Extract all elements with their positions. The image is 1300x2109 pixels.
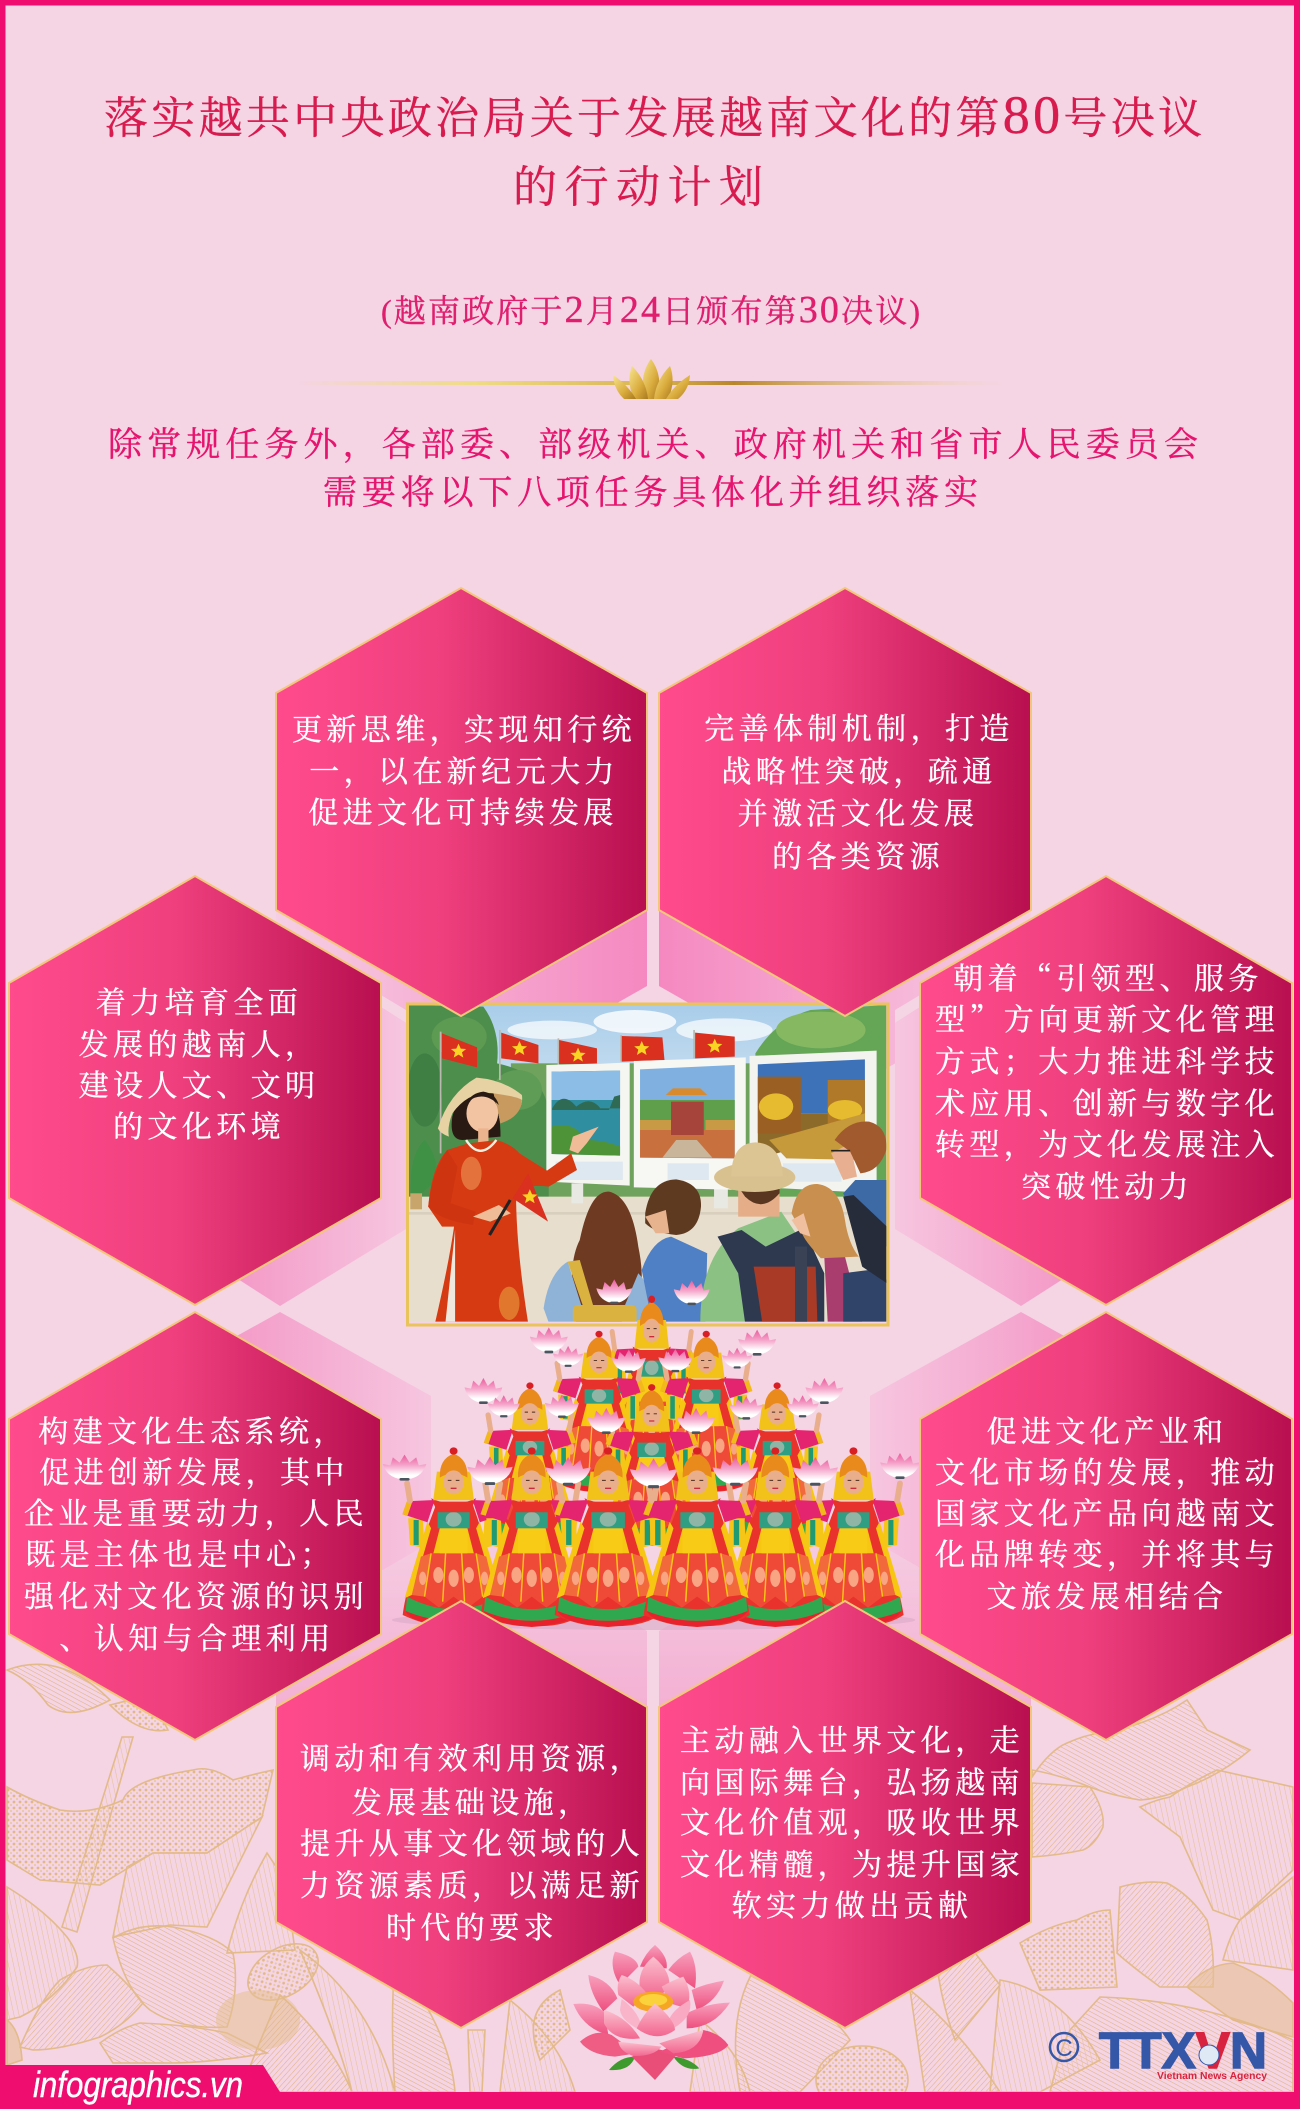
hexagon 5: cultural ecosystem: 企业是重要动力，人民 [24,1489,368,1533]
hexagon 3: people and environment: 着力培育全面 [96,978,302,1022]
hexagon 4: culture management: 朝着“引领型、服务 [953,954,1263,998]
hexagon 6: cultural industry: 文化市场的发展，推动 [935,1448,1279,1492]
hexagon 4: culture management: 术应用、创新与数字化 [935,1079,1279,1123]
logo: TTXVN Vietnam News Agency: Vietnam News Agency [1157,2071,1267,2082]
hexagon 8: international integration: 主动融入世界文化，走 [680,1716,1024,1760]
hexagon 8: international integration: 文化价值观，吸收世界 [680,1798,1024,1842]
hexagon 7: resources and infrastructure: 力资源素质，以满足新 [300,1861,644,1905]
hexagon 7: resources and infrastructure: 调动和有效利用资源， [300,1734,644,1778]
hexagon 2: institutions: 完善体制机制，打造 [704,704,1014,748]
hexagon 1: update thinking [276,588,647,1016]
subtitle: (越南政府于2月24日颁布第30决议) [381,289,920,331]
hexagon 7: resources and infrastructure [276,1601,647,2028]
logo: TTXVN Vietnam News Agency: C [1055,2035,1073,2062]
hexagon 8: international integration: 向国际舞台，弘扬越南 [680,1758,1024,1802]
hexagon 4: culture management: 型”方向更新文化管理 [935,995,1279,1039]
hexagon 3: people and environment [9,876,381,1305]
hexagon 6: cultural industry: 国家文化产品向越南文 [935,1489,1279,1533]
hexagon 4: culture management: 突破性动力 [1021,1162,1193,1206]
hexagon 5: cultural ecosystem [9,1312,381,1740]
intro text: 需要将以下八项任务具体化并组织落实 [323,474,978,512]
background lotus line art [7,1664,1293,2109]
hexagon 2: institutions [659,588,1031,1016]
hexagon 2: institutions: 并激活文化发展 [738,789,978,833]
hexagon 7: resources and infrastructure: 提升从事文化领域的人 [300,1819,644,1863]
pale backing hexagons [129,664,1172,1953]
hexagon 1: update thinking: 促进文化可持续发展 [308,788,618,832]
hexagon 4: culture management: 转型，为文化发展注入 [935,1120,1279,1164]
intro text: 除常规任务外，各部委、部级机关、政府机关和省市人民委员会 [108,426,1198,464]
intro text [108,426,1198,512]
hexagon 1: update thinking: 一，以在新纪元大力 [309,747,619,791]
gold divider with lotus [297,359,1003,399]
hexagon 4: culture management: 方式；大力推进科学技 [935,1037,1279,1081]
hexagon 5: cultural ecosystem: 促进创新发展，其中 [39,1448,349,1492]
hexagon 5: cultural ecosystem: 、认知与合理利用 [59,1614,335,1658]
hexagon 5: cultural ecosystem: 强化对文化资源的识别 [24,1572,368,1616]
photo: tour guide and tourists [408,1004,888,1325]
hexagon 8: international integration: 软实力做出贡献 [732,1881,972,1925]
icon: pink lotus flower [573,1945,730,2080]
footer label: infographics.vn: infographics.vn [33,2064,243,2105]
hexagon 6: cultural industry: 促进文化产业和 [987,1407,1227,1451]
hexagon 8: international integration [659,1601,1031,2028]
hexagon 6: cultural industry: 化品牌转变，并将其与 [935,1530,1279,1574]
hexagon 3: people and environment: 建设人文、文明 [79,1061,319,1105]
title: 落实越共中央政治局关于发展越南文化的第80号决议 [104,85,1202,145]
hexagon 8: international integration: 文化精髓，为提升国家 [680,1840,1024,1884]
hexagon 3: people and environment: 发展的越南人， [79,1020,319,1064]
hexagon 4: culture management [920,876,1292,1305]
hexagon 3: people and environment: 的文化环境 [113,1102,285,1146]
hexagon 7: resources and infrastructure: 时代的要求 [386,1903,558,1947]
hexagon 6: cultural industry [920,1312,1292,1740]
hexagon 2: institutions: 战略性突破，疏通 [721,747,997,791]
hexagon 1: update thinking: 更新思维，实现知行统 [292,705,636,749]
hexagon 7: resources and infrastructure: 发展基础设施， [352,1778,592,1822]
title: 的行动计划 [513,163,763,212]
logo: TTXVN Vietnam News Agency: TTXVN [1099,2022,1267,2079]
dancers with lotus lamps [383,1279,920,1630]
hexagon 5: cultural ecosystem: 既是主体也是中心； [25,1530,335,1574]
title [104,85,1202,212]
hexagon 5: cultural ecosystem: 构建文化生态系统， [38,1407,348,1451]
hexagon 2: institutions: 的各类资源 [772,832,944,876]
hexagon 6: cultural industry: 文旅发展相结合 [987,1572,1227,1616]
